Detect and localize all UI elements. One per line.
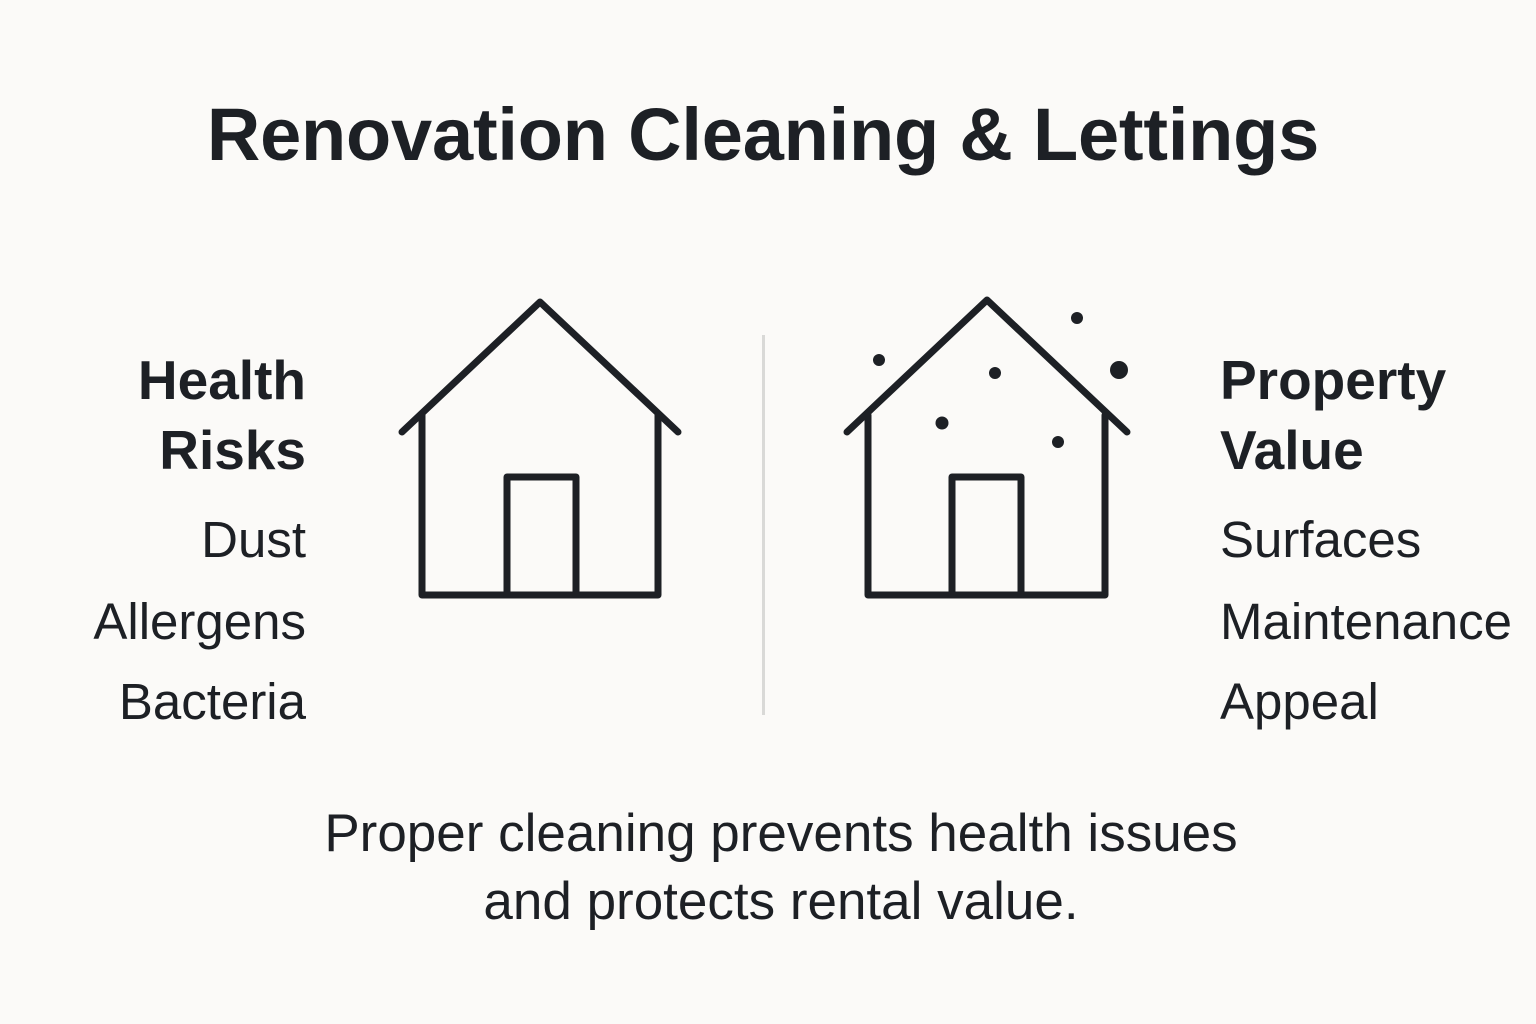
icon: clean house [398,298,682,598]
heading: property value [1220,349,1446,481]
title: Renovation Cleaning & Lettings [207,93,1319,176]
list: health risks: Dust [201,511,306,568]
list: property value: Maintenance [1220,593,1512,650]
list: property value: Appeal [1220,673,1379,730]
footer text: Proper cleaning prevents health issues [324,804,1238,863]
heading: health risks: Health [138,349,306,411]
list: health risks [93,511,306,730]
footer text: and protects rental value. [483,872,1079,931]
heading: health risks: Risks [159,419,306,481]
divider [762,335,765,715]
heading: health risks [138,349,306,481]
list: health risks: Bacteria [119,673,306,730]
heading: property value: Property [1220,349,1446,411]
icon: dusty house [844,296,1130,598]
heading: property value: Value [1220,419,1364,481]
list: property value [1220,511,1512,730]
panel: property value [1220,349,1512,730]
panel: health risks [93,349,306,730]
list: health risks: Allergens [93,593,306,650]
footer text [324,804,1238,931]
list: property value: Surfaces [1220,511,1421,568]
